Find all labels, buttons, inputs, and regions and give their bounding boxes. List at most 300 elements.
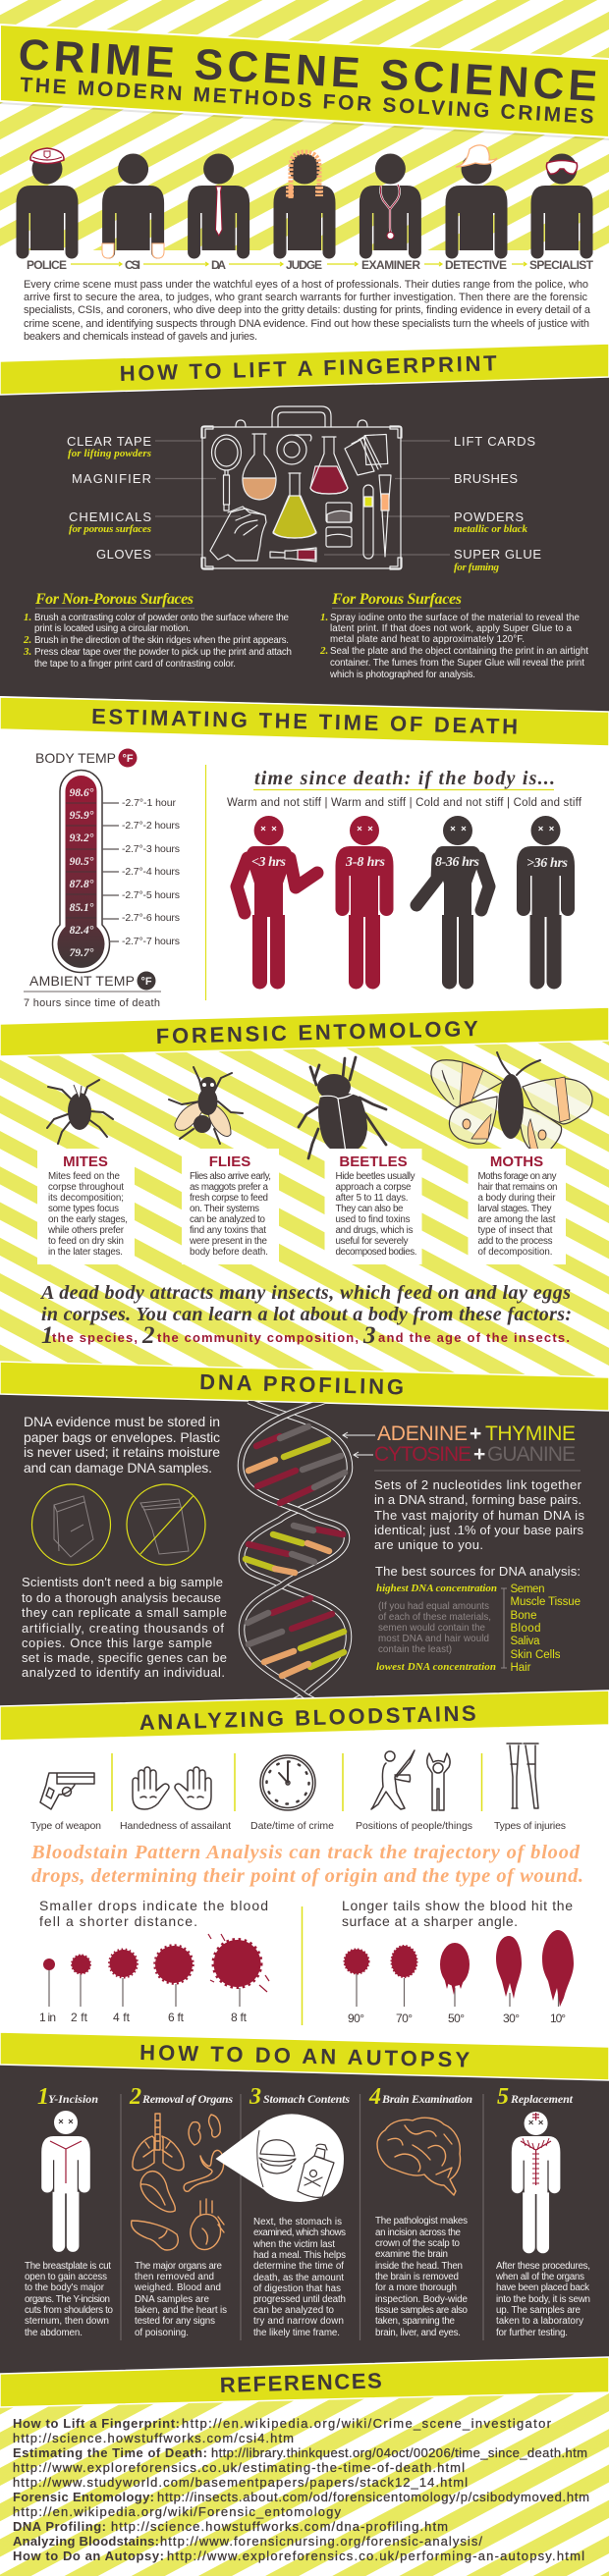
step 3: stomach contents: had a meal. This helps — [253, 2250, 346, 2261]
step 3: stomach contents: the likely time frame. — [253, 2328, 340, 2338]
step 5: replacement: have been placed back — [496, 2282, 589, 2293]
porous instructions: latent print. If that does not work, apply Super Glue to a — [330, 623, 573, 634]
step 3: stomach contents: death, as the amount — [253, 2273, 344, 2283]
callout: stomach contents magnifier — [216, 2114, 344, 2202]
icon: organs — [132, 2114, 224, 2250]
leader lines — [155, 441, 450, 555]
DNA sources ranking: Muscle Tissue — [511, 1596, 581, 1608]
step 3: stomach contents: determine the time of — [253, 2261, 344, 2272]
kit labels left: GLOVES — [96, 547, 151, 562]
sample text: they can replicate a small sample — [22, 1605, 227, 1620]
step 5: replacement: up. The samples are — [496, 2305, 581, 2316]
step 3: stomach contents: examined, which shows — [253, 2227, 346, 2238]
step 5: replacement: when all of the organs — [495, 2272, 584, 2282]
ambient temp label — [24, 972, 161, 1009]
thermometer — [53, 770, 110, 972]
drop size text — [39, 1898, 268, 1929]
paper bag text: is never used; it retains moisture — [24, 1444, 220, 1460]
thermometer hour ticks: -2.7°-4 hours — [122, 866, 180, 878]
kit labels left: CHEMICALS — [69, 510, 151, 524]
tail length text: surface at a sharper angle. — [342, 1913, 518, 1929]
non-porous instructions: 2. — [23, 634, 31, 646]
reference list: http://en.wikipedia.org/wiki/Crime_scene_investigator — [182, 2416, 552, 2431]
step 5: replacement: After these procedures, — [496, 2261, 590, 2272]
intro text — [24, 279, 591, 343]
chart: drop tail by angle: 50° — [448, 2012, 465, 2025]
heading banner: REFERENCES — [219, 2368, 382, 2397]
card: mites: to feed on dry skin — [48, 1236, 124, 1247]
step 4: brain examination: inspection. Body-wide — [375, 2294, 469, 2305]
statement about insects: 3 — [362, 1322, 375, 1349]
time since death heading — [227, 768, 582, 809]
icon: burger — [259, 2140, 296, 2174]
reference list: http://en.wikipedia.org/wiki/Forensic_entomology — [13, 2504, 342, 2519]
tail length text — [342, 1898, 573, 1929]
step 1: Y-incision: Y-Incision — [48, 2092, 98, 2106]
icon: magnifier — [212, 435, 242, 510]
DNA sources ranking: (If you had equal amounts — [378, 1601, 489, 1612]
title banner — [0, 25, 609, 140]
step 1: Y-incision: to the body's major — [25, 2282, 105, 2293]
icon: yellow conical flask — [273, 473, 316, 538]
icon: clock — [260, 1755, 315, 1810]
nucleotide text: The best sources for DNA analysis: — [375, 1564, 581, 1579]
title: CRIME SCENE SCIENCE — [17, 30, 598, 111]
reference list: http://www.exploreforensics.co.uk/performing-an-autopsy.html — [167, 2549, 584, 2563]
step 5: replacement: 5 — [497, 2084, 509, 2110]
porous instructions: 1. — [320, 612, 328, 623]
card: moths — [468, 1149, 566, 1264]
DNA sources ranking: most DNA and hair would — [378, 1634, 489, 1644]
card: flies: can be analyzed to — [190, 1214, 266, 1225]
section: how to do an autopsy — [0, 2032, 609, 2340]
card: flies: FLIES — [209, 1154, 250, 1170]
role labels with arrows: DA — [211, 258, 226, 272]
figure: incised body — [41, 2111, 90, 2252]
step 2: removal of organs: The major organs are — [135, 2261, 223, 2272]
kit labels left: for porous surfaces — [69, 523, 151, 535]
background: caution stripes, top — [0, 0, 609, 250]
non-porous instructions: 3. — [23, 646, 31, 658]
thermometer: 98.6° — [70, 787, 94, 799]
icon: moth — [431, 1052, 592, 1152]
reference list: http://www.forensicnursing.org/forensic-analysis/ — [160, 2534, 482, 2549]
step 1: Y-incision: The breastplate is cut — [25, 2261, 111, 2272]
chart: drop size by height: 1 in — [39, 2011, 56, 2024]
reference list: How to Do an Autopsy: — [13, 2549, 164, 2563]
card: beetles — [324, 1149, 422, 1264]
non-porous instructions: Brush in the direction of the skin ridges when the print appears. — [34, 635, 289, 646]
factor captions: Handedness of assailant — [120, 1820, 231, 1832]
panel background: autopsy — [0, 2032, 609, 2374]
statement about insects: the community composition, — [157, 1330, 359, 1345]
icon: lift cards — [345, 434, 388, 475]
step 2: removal of organs: taken, and the heart is — [135, 2305, 227, 2316]
DNA sources ranking: Bone — [511, 1610, 536, 1622]
thermometer: 87.8° — [70, 879, 94, 890]
step 3: stomach contents: Next, the stomach is — [253, 2217, 342, 2227]
ambient temp label: 7 hours since time of death — [24, 997, 160, 1009]
base pair legend: GUANINE — [487, 1443, 576, 1466]
card: mites: while others prefer — [47, 1225, 125, 1236]
heading banner — [0, 2032, 609, 2080]
step 2: removal of organs — [129, 2084, 233, 2338]
step 4: brain examination: examine the brain — [375, 2249, 448, 2260]
thermometer: 85.1° — [70, 902, 94, 914]
chart: drop size by height: 6 ft — [168, 2011, 185, 2024]
card: flies: body before death. — [190, 1247, 268, 1258]
card: beetles: and drugs, which is — [336, 1225, 414, 1236]
section: DNA profiling — [0, 1362, 609, 1708]
kit labels right: LIFT CARDS — [454, 434, 535, 449]
nucleotide text: in a DNA strand, forming base pairs. — [374, 1492, 581, 1507]
kit labels left: MAGNIFIER — [72, 471, 151, 486]
figure: stitched body — [512, 2112, 560, 2253]
card: flies: as maggots prefer a — [190, 1182, 269, 1193]
role labels with arrows: DETECTIVE — [445, 258, 507, 272]
heading banner — [0, 1362, 609, 1411]
non-porous instructions: Brush a contrasting color of powder onto the surface where the — [34, 613, 290, 623]
kit labels right — [454, 434, 541, 573]
DNA sources ranking: highest DNA concentration — [376, 1583, 497, 1594]
panel background: DNA — [0, 1362, 609, 1706]
paper bag text — [24, 1414, 220, 1476]
DNA sources ranking: of each of these materials, — [378, 1612, 491, 1623]
background: caution stripes, entomology — [0, 1011, 609, 1377]
DNA sources ranking: Semen — [511, 1583, 544, 1595]
card: mites: in the later stages. — [48, 1247, 123, 1258]
step 3: stomach contents: 3 — [249, 2084, 261, 2110]
step 4: brain examination: Brain Examination — [381, 2092, 472, 2106]
intro text: crime scene, and identifying suspects through DNA evidence. Find out how these specialists turn the wheels of justice with — [24, 318, 589, 330]
card: mites: Mites feed on the — [48, 1171, 121, 1182]
step 5: replacement: taken to a laboratory — [496, 2316, 583, 2327]
step 5: replacement: into the body, it is sewn — [496, 2294, 590, 2305]
icon: fly — [169, 1067, 243, 1144]
figure: DA — [188, 153, 249, 259]
card: moths: add to the process — [477, 1236, 553, 1247]
step 3: stomach contents: can be analyzed to — [253, 2305, 335, 2316]
reference list: Estimating the Time of Death: — [13, 2445, 207, 2460]
card: moths: are among the last — [477, 1214, 556, 1225]
statement about insects: in corpses. You can learn a lot about a body from these factors: — [41, 1304, 572, 1325]
card: flies: fresh corpse to feed — [190, 1193, 268, 1204]
reference list: http://library.thinkquest.org/04oct/00206/time_since_death.htm — [211, 2445, 587, 2460]
figure: cold and not stiff — [416, 816, 489, 990]
figure: judge — [273, 152, 336, 259]
step 4: brain examination: tissue samples are also — [375, 2305, 469, 2316]
role labels with arrows — [27, 258, 594, 272]
background: caution stripes, references — [0, 2357, 609, 2576]
step 2: removal of organs: of poisoning. — [135, 2328, 189, 2338]
reference list: Forensic Entomology: — [13, 2490, 154, 2504]
icon: round flask, peach — [243, 434, 276, 500]
pattern analysis statement: Bloodstain Pattern Analysis can track the trajectory of blood — [30, 1842, 581, 1863]
chart: drop tail by angle: 10° — [550, 2012, 566, 2025]
icon: mite — [47, 1080, 113, 1144]
step 2: removal of organs: tested for any signs — [135, 2316, 215, 2327]
step 5: replacement — [495, 2084, 590, 2338]
figure: warm and stiff — [336, 816, 393, 990]
heading banner: HOW TO LIFT A FINGERPRINT — [119, 350, 498, 386]
section: forensic entomology — [0, 1007, 609, 1349]
reference list: http://insects.about.com/od/forensicentomology/p/csibodymoved.htm — [157, 2490, 589, 2504]
step 1: Y-incision: the abdomen. — [25, 2328, 83, 2338]
step 3: stomach contents: when the victim last — [252, 2239, 335, 2250]
chart: drop tail by angle — [344, 1930, 574, 2025]
porous instructions: 2. — [319, 645, 328, 657]
thermometer hour ticks: -2.7°-1 hour — [122, 797, 177, 809]
thermometer hour ticks: -2.7°-7 hours — [122, 936, 180, 947]
card: mites: MITES — [63, 1154, 108, 1170]
role labels with arrows: JUDGE — [286, 258, 322, 272]
heading banner — [0, 697, 609, 746]
card: mites — [37, 1149, 135, 1264]
heading banner: HOW TO DO AN AUTOPSY — [139, 2040, 471, 2072]
section: how to lift a fingerprint — [0, 344, 609, 680]
role labels with arrows: SPECIALIST — [529, 258, 594, 272]
non-porous instructions: the tape to a finger print card of contrasting color. — [34, 659, 236, 670]
DNA sources ranking: Hair — [511, 1662, 531, 1674]
card: beetles: useful for severely — [336, 1236, 409, 1247]
thermometer hour ticks: -2.7°-6 hours — [122, 912, 180, 924]
icon: beetle — [299, 1057, 386, 1158]
card: beetles: used to find toxins — [336, 1214, 411, 1225]
reference list: http://science.howstuffworks.com/dna-profiling.htm — [111, 2519, 448, 2534]
porous instructions — [319, 591, 588, 680]
card: flies: Flies also arrive early, — [190, 1171, 271, 1182]
body temp label: °F — [122, 753, 134, 765]
card: moths: type of insect that — [477, 1225, 553, 1236]
icon: brain — [377, 2118, 461, 2195]
card: beetles: after 5 to 11 days. — [336, 1193, 409, 1204]
figure: specialist — [530, 153, 593, 259]
reference list: How to Lift a Fingerprint: — [13, 2416, 180, 2431]
step 4: brain examination: crown of the scalp to — [375, 2238, 461, 2249]
sample text: copies. Once this large sample — [22, 1636, 212, 1650]
step 4: brain examination — [368, 2084, 472, 2338]
heading banner: ESTIMATING THE TIME OF DEATH — [91, 704, 518, 739]
card: beetles: They can also be — [336, 1204, 404, 1214]
nucleotide text: Sets of 2 nucleotides link together — [374, 1477, 582, 1492]
drop size text: fell a shorter distance. — [39, 1913, 197, 1929]
step 4: brain examination: an incision across the — [375, 2227, 462, 2238]
figure: CSI — [102, 153, 164, 259]
thermometer: 82.4° — [70, 925, 94, 937]
porous instructions: metal plate and heat to approximately 120°F. — [330, 634, 525, 645]
heading banner — [0, 1007, 609, 1056]
statement about insects: the species, — [52, 1330, 138, 1345]
intro text: arrive first to secure the area, to judges, who grant search warrants for further investigation. Then there are the forensic — [24, 292, 587, 303]
porous instructions: which is photographed for analysis. — [329, 670, 475, 680]
base pair legend: + — [473, 1443, 485, 1466]
DNA sources ranking — [376, 1583, 581, 1674]
non-porous instructions: print is located using a circular motion. — [34, 623, 191, 634]
intro text: Every crime scene must pass under the watchful eyes of a host of professionals. Their duties range from the police, who — [24, 279, 588, 291]
step 4: brain examination: 4 — [368, 2084, 381, 2110]
step 3: stomach contents — [216, 2084, 350, 2338]
sample text: artificially, creating thousands of — [22, 1621, 224, 1636]
DNA sources ranking: lowest DNA concentration — [376, 1661, 496, 1673]
DNA sources ranking: Saliva — [511, 1636, 540, 1647]
sample text: Scientists don't need a big sample — [22, 1575, 223, 1589]
role labels with arrows: CSI — [125, 258, 140, 272]
kit labels right: BRUSHES — [454, 471, 518, 486]
statement about insects: 1 — [41, 1322, 53, 1349]
figure: warm and stiff: 3-8 hrs — [345, 855, 386, 870]
step 2: removal of organs: then removed and — [135, 2272, 214, 2282]
nucleotide text — [374, 1477, 585, 1579]
nucleotide text: are unique to you. — [374, 1537, 483, 1552]
step 1: Y-incision: open to gain access — [25, 2272, 107, 2282]
thermometer hour ticks — [102, 797, 180, 947]
chart: drop tail by angle: 90° — [348, 2012, 364, 2025]
sample text: analyzed to identify an individual. — [22, 1665, 225, 1680]
reference list: Analyzing Bloodstains: — [13, 2534, 159, 2549]
heading banner — [0, 1690, 609, 1741]
step 1: Y-incision: cuts from shoulders to — [25, 2305, 114, 2316]
heading banner: FORENSIC ENTOMOLOGY — [156, 1016, 478, 1048]
panel background: fingerprint — [0, 344, 609, 712]
step 4: brain examination: The pathologist makes — [375, 2216, 468, 2227]
drop size text: Smaller drops indicate the blood — [39, 1898, 268, 1913]
card: flies: were present in the — [189, 1236, 268, 1247]
icon: glue tube — [270, 548, 316, 562]
paper bag text: and can damage DNA samples. — [24, 1460, 212, 1476]
factor captions: Type of weapon — [30, 1820, 101, 1832]
icon: red conical flask — [310, 437, 348, 494]
factor captions: Date/time of crime — [250, 1820, 334, 1832]
step 4: brain examination: brain, liver, and eyes. — [375, 2328, 461, 2338]
non-porous instructions: For Non-Porous Surfaces — [34, 591, 194, 608]
step 4: brain examination: inside the head. Then — [375, 2261, 463, 2272]
porous instructions: Spray iodine onto the surface of the material to reveal the — [330, 613, 581, 623]
icon: paper bag — [31, 1484, 110, 1565]
chart: drop size by height: 2 ft — [71, 2011, 88, 2024]
reference list — [13, 2416, 589, 2563]
reference list: http://science.howstuffworks.com/csi4.htm — [13, 2431, 294, 2445]
figure: detective — [446, 145, 507, 259]
thermometer hour ticks: -2.7°-5 hours — [122, 889, 180, 901]
chart: drop tail by angle: 30° — [503, 2012, 520, 2025]
thermometer: 93.2° — [70, 832, 94, 844]
thermometer hour ticks: -2.7°-2 hours — [122, 820, 180, 832]
card: moths: larval stages. They — [477, 1204, 552, 1214]
step 4: brain examination: the brain is removed — [375, 2272, 459, 2282]
body temp label — [35, 748, 138, 768]
DNA sources ranking: Blood — [511, 1623, 540, 1635]
card: mites: some types focus — [48, 1204, 119, 1214]
icon: people positions — [371, 1750, 450, 1810]
sample text — [22, 1575, 227, 1680]
team of professionals — [16, 145, 593, 259]
heading banner — [0, 344, 609, 395]
base pair legend: THYMINE — [485, 1422, 576, 1445]
step 4: brain examination: for a more thorough — [375, 2282, 457, 2293]
paper bag text: paper bags or envelopes. Plastic — [24, 1429, 220, 1445]
thermometer hour ticks: -2.7°-3 hours — [122, 843, 180, 855]
kit labels right: for fuming — [454, 562, 499, 573]
step 4: brain examination: taken, spanning the — [375, 2316, 456, 2327]
step 2: removal of organs: weighed. Blood and — [134, 2282, 221, 2293]
icon: tape roll — [277, 435, 311, 464]
pattern analysis statement — [30, 1842, 583, 1887]
card: beetles: BEETLES — [339, 1154, 408, 1170]
icon: handgun — [40, 1773, 94, 1809]
intro text: beakers and chemicals instead of gavels and juries. — [24, 331, 257, 343]
figure: police — [16, 148, 79, 259]
kit labels left: CLEAR TAPE — [67, 434, 151, 449]
factor captions — [30, 1820, 566, 1832]
heading banner: DNA PROFILING — [199, 1369, 404, 1399]
kit labels left — [67, 434, 151, 562]
kit labels right: SUPER GLUE — [454, 547, 541, 562]
figure: warm and not stiff — [237, 816, 317, 990]
role labels with arrows: POLICE — [27, 258, 67, 272]
step 2: removal of organs: DNA samples are — [135, 2294, 210, 2305]
reference list: http://www.studyworld.com/basementpapers/papers/stack12_14.html — [13, 2475, 468, 2490]
chart: drop size by height — [39, 1934, 269, 2024]
time since death heading: time since death: if the body is... — [254, 768, 555, 789]
base pair legend — [343, 1422, 581, 1471]
non-porous instructions: Press clear tape over the powder to pick up the print and attach — [34, 647, 292, 658]
statement about insects — [39, 1282, 572, 1349]
ambient temp label: °F — [140, 976, 152, 988]
step 3: stomach contents: progressed until death — [253, 2294, 346, 2305]
card: flies: find any toxins that — [190, 1225, 266, 1236]
step 2: removal of organs: 2 — [129, 2084, 141, 2110]
base pair legend: ADENINE — [377, 1422, 468, 1445]
chart: drop size by height: 8 ft — [231, 2011, 248, 2024]
statement about insects: and the age of the insects. — [378, 1330, 570, 1345]
figure: cold and not stiff: 8-36 hrs — [435, 855, 480, 870]
step 3: stomach contents: try and narrow down — [253, 2316, 344, 2327]
section: analyzing bloodstains — [0, 1690, 609, 2025]
icon: powder jars — [326, 503, 352, 547]
DNA sources ranking: Skin Cells — [511, 1649, 561, 1661]
icon: gloves — [210, 507, 266, 561]
subtitle: THE MODERN METHODS FOR SOLVING CRIMES — [20, 74, 594, 129]
non-porous instructions: 1. — [24, 612, 31, 623]
section: references — [0, 2357, 609, 2563]
DNA sources ranking: semen would contain the — [378, 1623, 486, 1634]
figure: warm and not stiff: <3 hrs — [251, 855, 287, 870]
sample text: set is made, specific genes can be — [22, 1650, 227, 1665]
heading banner: ANALYZING BLOODSTAINS — [138, 1700, 476, 1735]
kit labels right: POWDERS — [454, 510, 524, 524]
thermometer: 90.5° — [70, 856, 94, 868]
pattern analysis statement: drops, determining their point of origin and the type of wound. — [31, 1865, 583, 1887]
step 1: Y-incision — [25, 2084, 114, 2338]
figure: cold and stiff — [517, 816, 575, 990]
icon: crutches — [507, 1744, 538, 1808]
paper bag text: DNA evidence must be stored in — [24, 1414, 220, 1429]
card: flies: on. Their systems — [190, 1204, 259, 1214]
card: mites: corpse throughout — [48, 1182, 124, 1193]
thermometer: 95.9° — [70, 810, 94, 822]
tail length text: Longer tails show the blood hit the — [342, 1898, 573, 1913]
icon: hands — [133, 1767, 211, 1809]
body temp label: BODY TEMP — [35, 750, 116, 766]
role labels with arrows: EXAMINER — [361, 258, 420, 272]
heading banner — [0, 2357, 609, 2407]
porous instructions: container. The fumes from the Super Glue will reveal the print — [330, 658, 584, 669]
DNA sources ranking: contain the least) — [378, 1644, 452, 1655]
step 1: Y-incision: sternum, then down — [25, 2316, 109, 2327]
card: moths: hair that remains on — [477, 1182, 558, 1193]
card: mites: its decomposition; — [48, 1193, 124, 1204]
kit labels right: metallic or black — [454, 523, 528, 535]
